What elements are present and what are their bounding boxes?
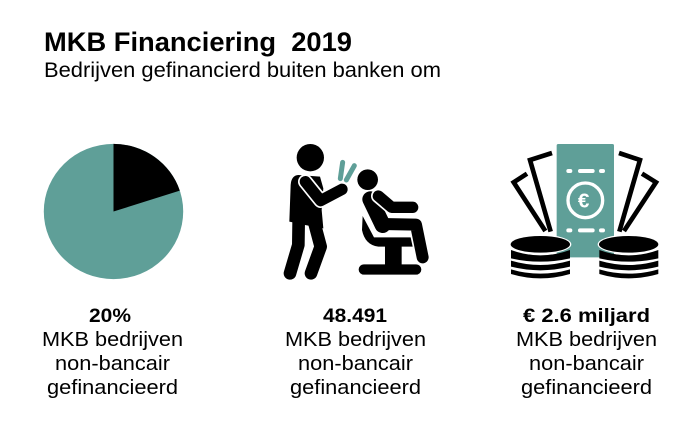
text block: 20% (42, 306, 183, 399)
text block: € 2.6 miljard (516, 306, 657, 399)
text block: € 2.6 miljard: MKB bedrijven (516, 328, 657, 351)
left coin stack (509, 235, 571, 278)
icon: hairdresser with seated client (289, 144, 423, 275)
text block: 48.491: gefinancieerd (290, 376, 421, 399)
title: MKB Financiering 2019 (44, 27, 352, 57)
right coin stack (598, 235, 660, 278)
text block: 48.491: 48.491 (323, 306, 387, 327)
seated client (357, 169, 423, 257)
text block: € 2.6 miljard: € 2.6 miljard (523, 306, 650, 327)
text block: 20%: 20% (89, 306, 131, 327)
barber chair (359, 216, 421, 275)
text block: 20%: gefinancieerd (47, 376, 178, 399)
text block: 48.491 (285, 306, 426, 399)
text block: 20%: MKB bedrijven (42, 328, 183, 351)
icon: banknote with coin stacks (509, 144, 660, 278)
text block: € 2.6 miljard: non-bancair (529, 352, 644, 375)
text block: 48.491: MKB bedrijven (285, 328, 426, 351)
subtitle: Bedrijven gefinancierd buiten banken om (44, 59, 441, 82)
scissors (340, 162, 354, 180)
central banknote (557, 144, 614, 257)
central banknote: € (578, 189, 590, 212)
text block: € 2.6 miljard: gefinancieerd (521, 376, 652, 399)
right fanned notes (619, 153, 656, 232)
text block: 48.491: non-bancair (298, 352, 413, 375)
text block: 20%: non-bancair (55, 352, 170, 375)
standing hairdresser (289, 144, 342, 273)
pie chart: 20% share (44, 144, 183, 279)
left fanned notes (514, 153, 552, 232)
